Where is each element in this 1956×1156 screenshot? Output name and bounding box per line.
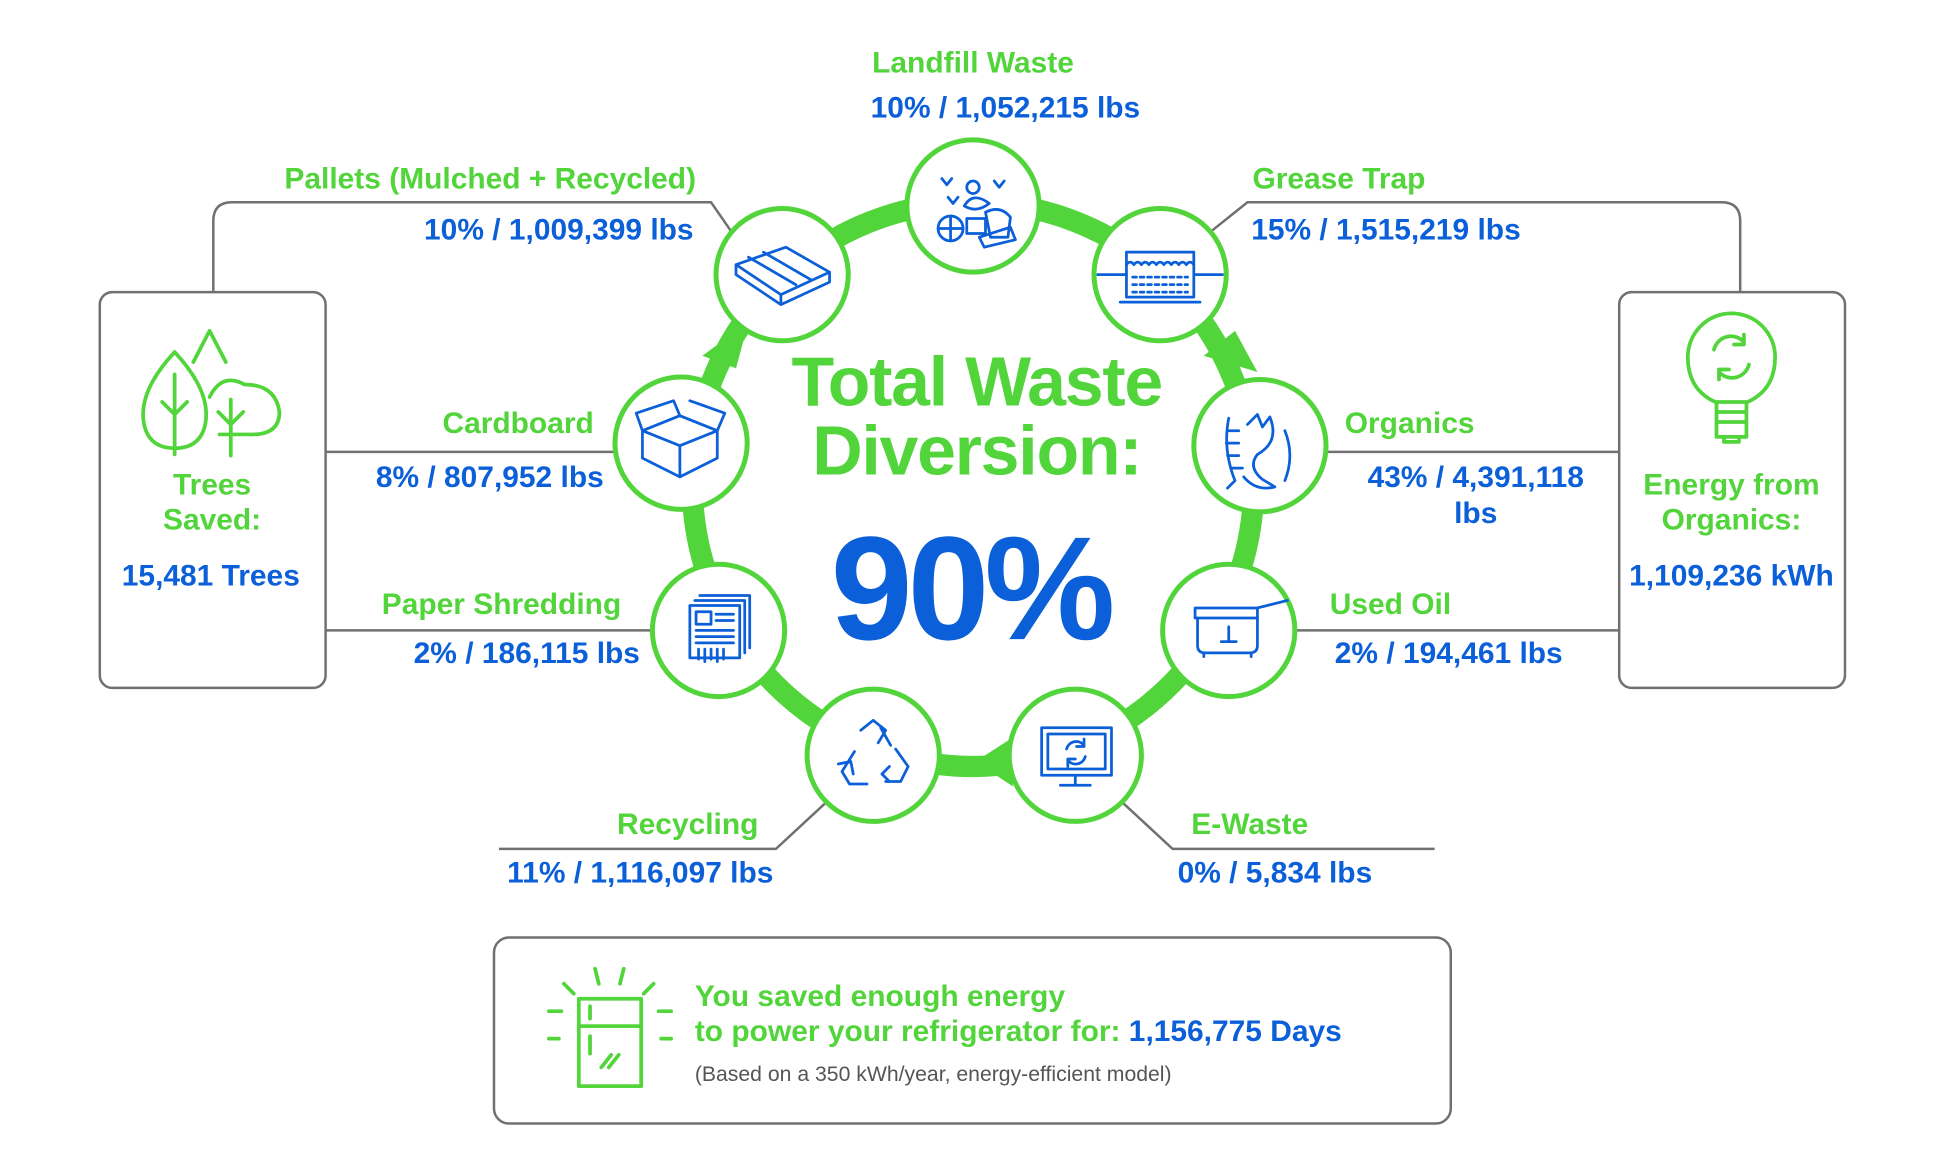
label: pallets: 10% / 1,009,399 lbs bbox=[424, 214, 694, 247]
label: pallets bbox=[284, 162, 696, 247]
label: pallets: Pallets (Mulched + Recycled) bbox=[284, 162, 696, 196]
node: used oil bbox=[1163, 564, 1295, 697]
panel: trees saved: Saved: bbox=[163, 503, 261, 536]
panel: energy from organics: Organics: bbox=[1662, 503, 1801, 536]
icon: bulb bbox=[1688, 313, 1775, 442]
label: grease trap: Grease Trap bbox=[1252, 162, 1425, 196]
central title: Total Waste bbox=[792, 343, 1162, 421]
node: recycling bbox=[807, 689, 939, 821]
label: used oil: Used Oil bbox=[1330, 588, 1451, 621]
label: cardboard: 8% / 807,952 lbs bbox=[376, 461, 604, 494]
label: recycling: 11% / 1,116,097 lbs bbox=[507, 857, 773, 890]
label: landfill: Landfill Waste bbox=[872, 46, 1074, 79]
label: cardboard: Cardboard bbox=[442, 407, 594, 440]
label: organics: Organics bbox=[1345, 407, 1474, 440]
label: used oil: 2% / 194,461 lbs bbox=[1335, 637, 1563, 670]
connector lines bbox=[213, 202, 1740, 849]
panel: trees saved: 15,481 Trees bbox=[122, 559, 300, 592]
node: pallets bbox=[716, 208, 848, 341]
node: e-waste bbox=[1009, 689, 1141, 821]
label: recycling bbox=[507, 808, 773, 890]
central title: Diversion: bbox=[812, 411, 1141, 489]
label: landfill bbox=[871, 46, 1140, 124]
label: recycling: Recycling bbox=[617, 808, 758, 841]
label: used oil bbox=[1330, 588, 1563, 670]
panel: trees saved bbox=[100, 292, 326, 688]
label: grease trap bbox=[1251, 162, 1521, 247]
central title bbox=[792, 343, 1162, 671]
label: paper shredding: 2% / 186,115 lbs bbox=[414, 637, 640, 670]
label: landfill: 10% / 1,052,215 lbs bbox=[871, 91, 1140, 124]
label: organics: lbs bbox=[1454, 497, 1497, 530]
panel: refrigerator savings bbox=[494, 938, 1451, 1124]
panel: energy from organics bbox=[1619, 292, 1845, 688]
label: organics: 43% / 4,391,118 bbox=[1368, 461, 1584, 494]
panel: refrigerator savings: You saved enough energy bbox=[695, 980, 1065, 1013]
node: paper shredding bbox=[652, 564, 785, 697]
panel: refrigerator savings: to power your refrigerator for: 1,156,775 Days bbox=[695, 1015, 1342, 1048]
panel: trees saved: Trees bbox=[173, 468, 251, 501]
central title: 90% bbox=[831, 507, 1112, 671]
label: paper shredding: Paper Shredding bbox=[382, 588, 621, 621]
panel: refrigerator savings: (Based on a 350 kWh/year, energy-efficient model) bbox=[695, 1063, 1172, 1086]
node: grease trap bbox=[1094, 208, 1226, 341]
panel: energy from organics: 1,109,236 kWh bbox=[1629, 559, 1834, 592]
node: landfill bbox=[907, 140, 1039, 272]
ring bbox=[692, 202, 1257, 786]
label: organics bbox=[1345, 407, 1584, 530]
node: organics bbox=[1194, 380, 1326, 512]
label: paper shredding bbox=[382, 588, 640, 670]
panel: energy from organics: Energy from bbox=[1643, 468, 1820, 501]
label: e-waste bbox=[1178, 808, 1372, 890]
icon: refrigerator bbox=[549, 969, 671, 1086]
icon: trees bbox=[143, 331, 279, 456]
label: cardboard bbox=[376, 407, 604, 494]
label: e-waste: 0% / 5,834 lbs bbox=[1178, 857, 1372, 890]
node: cardboard bbox=[615, 377, 747, 509]
label: e-waste: E-Waste bbox=[1191, 808, 1308, 841]
label: grease trap: 15% / 1,515,219 lbs bbox=[1251, 214, 1521, 247]
